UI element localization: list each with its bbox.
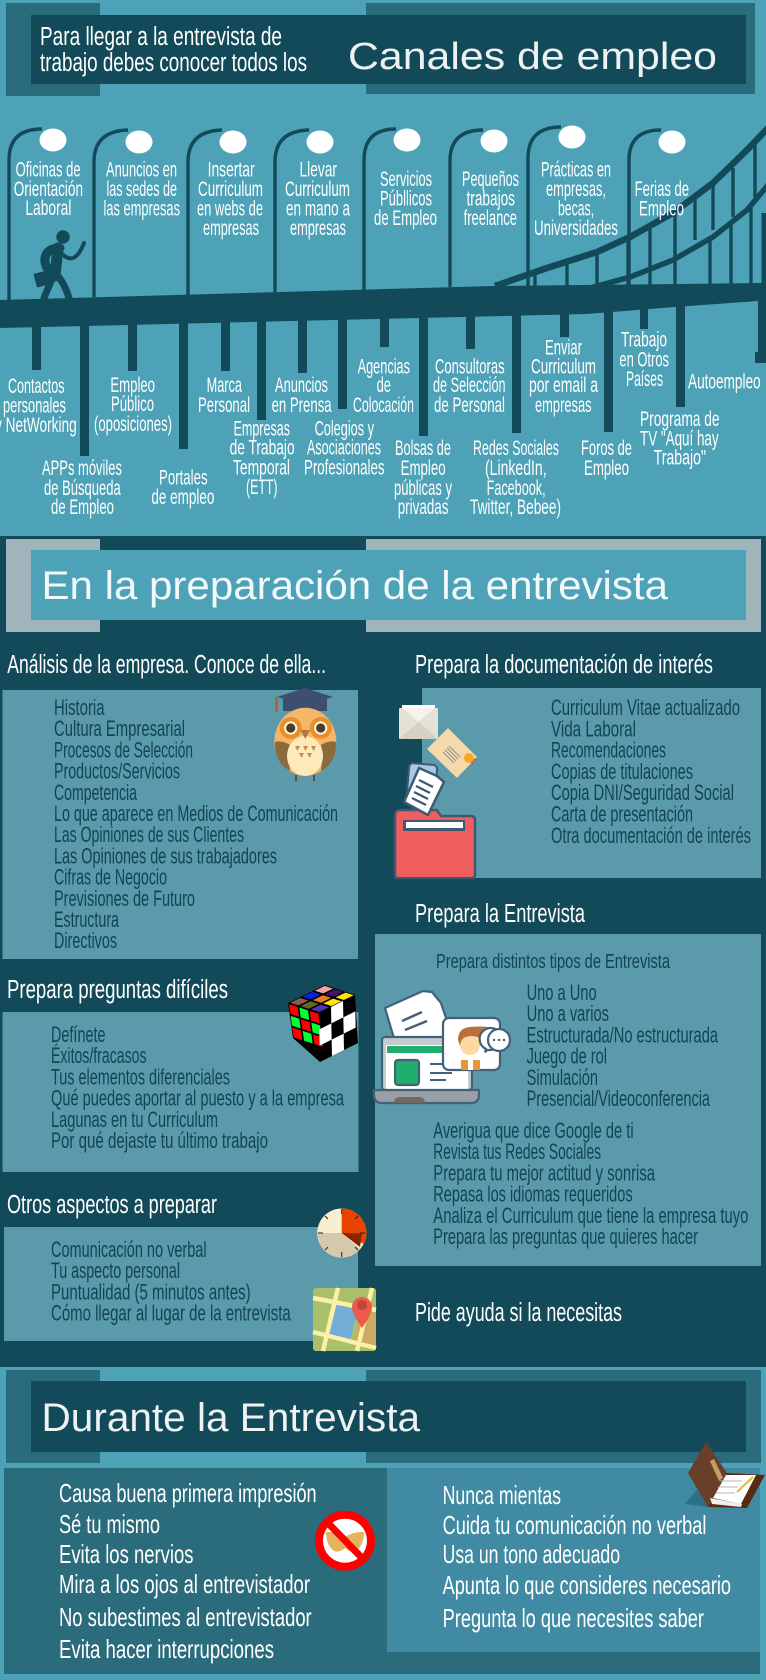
- panel: documentación de interés: [422, 688, 761, 878]
- channel: oficinas de orientación: Orientación: [14, 178, 83, 201]
- subheading: tipos de entrevista: Prepara distintos tipos de Entrevista: [436, 951, 671, 973]
- channel: consultoras: [433, 356, 506, 417]
- channel: anuncios en prensa: [272, 374, 332, 417]
- header: en la preparación de la entrevista: En la preparación de la entrevista: [42, 564, 669, 608]
- channel: contactos personales: personales: [3, 394, 66, 418]
- panel: columna derecha: [387, 1468, 760, 1652]
- panel: preguntas difíciles: Éxitos/fracasos: [51, 1043, 146, 1068]
- channel: agencias de colocación: de: [377, 374, 391, 397]
- channel: llevar curriculum: [285, 158, 350, 240]
- channel: programa de tv: [640, 408, 720, 470]
- channel: insertar curriculum: empresas: [203, 217, 259, 240]
- bridge deck: [0, 283, 766, 328]
- panel: otros aspectos: Puntualidad (5 minutos antes): [51, 1279, 251, 1304]
- channel: trabajo en otros países: Trabajo: [621, 328, 667, 352]
- panel: documentación de interés: Vida Laboral: [551, 716, 636, 741]
- list: columna derecha: Usa un tono adecuado: [443, 1539, 620, 1569]
- channel: prácticas: empresas,: [546, 178, 606, 201]
- section background: durante la entrevista: [0, 1367, 766, 1680]
- channel: marca personal: [198, 374, 250, 417]
- panel: preguntas difíciles: Qué puedes aportar al puesto y a la empresa: [51, 1086, 345, 1111]
- channel: empleo público: [94, 374, 172, 436]
- icon: laptop with candidate profile: [374, 991, 510, 1103]
- channel: apps móviles: APPs móviles: [42, 457, 122, 480]
- channel: insertar curriculum: Insertar: [208, 158, 255, 182]
- channel: oficinas de orientación: Oficinas de: [16, 158, 81, 182]
- channel: trabajo en otros países: [619, 328, 669, 391]
- channel: contactos personales: Contactos: [8, 375, 64, 398]
- list: columna izquierda: Causa buena primera impresión: [59, 1478, 317, 1508]
- list: columna izquierda: Evita los nervios: [59, 1539, 194, 1569]
- channel: prácticas: becas,: [558, 198, 594, 220]
- channel: anuncios en sedes: las empresas: [104, 198, 180, 220]
- panel: preguntas difíciles: Defínete: [51, 1022, 106, 1047]
- channel: redes sociales: [470, 437, 561, 519]
- list: consejos de preparación: Repasa los idiomas requeridos: [433, 1182, 633, 1207]
- channel: anuncios en prensa: en Prensa: [272, 394, 332, 417]
- panel: análisis de la empresa: Directivos: [54, 928, 117, 953]
- heading: prepara la entrevista: Prepara la Entrevista: [415, 900, 586, 928]
- lamp lights: [40, 126, 686, 154]
- header: durante la entrevista: Durante la Entrevista: [42, 1396, 421, 1440]
- channel: colegios y asociaciones: Colegios y: [315, 418, 374, 440]
- channel: colegios y asociaciones: [304, 418, 384, 480]
- panel: análisis de la empresa: Cultura Empresarial: [54, 716, 185, 741]
- list: tipos de entrevista: Uno a varios: [527, 1001, 609, 1026]
- channel: empleo público: Público: [111, 393, 154, 416]
- channel: empresas de trabajo temporal: de Trabajo: [230, 436, 295, 460]
- panel: análisis de la empresa: Previsiones de Futuro: [54, 886, 195, 911]
- channel: empleo público: Empleo: [110, 374, 155, 397]
- channel: trabajo en otros países: en Otros: [619, 348, 669, 372]
- intro text: trabajo debes conocer todos los: [40, 49, 307, 77]
- channel: servicios públicos: Públlicos: [380, 188, 432, 210]
- channel: servicios públicos: [374, 168, 437, 230]
- channel: empleo público: (oposiciones): [94, 413, 172, 436]
- heading: otros aspectos: Otros aspectos a preparar: [7, 1191, 217, 1219]
- channel: consultoras: de Selección: [433, 374, 506, 397]
- panel: prepara la entrevista: [375, 934, 761, 1266]
- channel: llevar curriculum: Llevar: [300, 158, 337, 182]
- list: consejos de preparación: Prepara tu mejor actitud y sonrisa: [433, 1160, 656, 1185]
- list: columna izquierda: [59, 1478, 317, 1664]
- section background: canales de empleo: [0, 0, 766, 536]
- channel: colegios y asociaciones: Asociaciones: [307, 436, 381, 460]
- header: durante la entrevista: [6, 1370, 761, 1463]
- channel: enviar curriculum por email: por email a: [529, 374, 598, 397]
- channel: programa de tv: Trabajo": [654, 446, 706, 470]
- channel: agencias de colocación: Colocación: [353, 394, 414, 417]
- hanging rods: [32, 298, 766, 456]
- list: tipos de entrevista: Simulación: [527, 1065, 598, 1090]
- icon: clock: [317, 1208, 367, 1258]
- channel: portales de empleo: Portales: [159, 466, 208, 490]
- channel: pequeños trabajos: trabajos: [466, 188, 515, 210]
- channel: insertar curriculum: [197, 158, 263, 240]
- header: en la preparación de la entrevista: [6, 539, 761, 632]
- channel: foros de empleo: [581, 437, 632, 480]
- channel: marca personal: Marca: [207, 374, 242, 397]
- list: columna izquierda: No subestimes al entrevistador: [59, 1602, 312, 1632]
- channel: trabajo en otros países: Países: [626, 368, 663, 391]
- list: tipos de entrevista: Uno a Uno: [527, 980, 597, 1005]
- channel: apps móviles: [42, 457, 122, 519]
- icon: envelope: [399, 705, 438, 739]
- list: tipos de entrevista: Juego de rol: [527, 1044, 607, 1069]
- channel: enviar curriculum por email: empresas: [535, 394, 592, 417]
- panel: análisis de la empresa: Competencia: [54, 780, 137, 805]
- panel: documentación de interés: Carta de presentación: [551, 802, 693, 826]
- panel: preguntas difíciles: Por qué dejaste tu último trabajo: [51, 1128, 268, 1153]
- list: columna izquierda: Sé tu mismo: [59, 1509, 160, 1539]
- channel: anuncios en sedes: las sedes de: [106, 178, 177, 201]
- panel: documentación de interés: Recomendaciones: [551, 738, 666, 763]
- channel: empresas de trabajo temporal: (ETT): [246, 476, 278, 499]
- channel: anuncios en sedes: Anuncios en: [106, 158, 177, 182]
- icon: map with pin: [313, 1288, 376, 1351]
- channel: prácticas: [534, 158, 618, 240]
- panel: otros aspectos: [4, 1227, 358, 1341]
- channel: bolsas de empleo: [394, 437, 452, 519]
- channel: empresas de trabajo temporal: Empresas: [234, 418, 290, 440]
- icon: folder with documents: [395, 763, 475, 878]
- panel: otros aspectos: Tu aspecto personal: [51, 1258, 180, 1283]
- channel: insertar curriculum: Curriculum: [198, 178, 263, 201]
- icon: diploma with seal: [427, 728, 477, 778]
- channel: consultoras: de Personal: [434, 394, 505, 417]
- intro text: [40, 23, 307, 77]
- header: canales de empleo: [6, 3, 755, 96]
- panel: otros aspectos: Comunicación no verbal: [51, 1237, 207, 1262]
- channel: portales de empleo: [151, 466, 214, 509]
- channel: bolsas de empleo: Empleo: [401, 457, 446, 480]
- channel: foros de empleo: Foros de: [581, 437, 632, 460]
- channel: empresas de trabajo temporal: Temporal: [233, 456, 290, 480]
- panel: análisis de la empresa: Estructura: [54, 907, 119, 932]
- channel: agencias de colocación: Agencias: [358, 356, 410, 378]
- channel: prácticas: Prácticas en: [541, 158, 611, 182]
- channel: programa de tv: Programa de: [640, 408, 720, 431]
- channel: oficinas de orientación: [14, 158, 83, 220]
- channel: foros de empleo: Empleo: [584, 457, 629, 480]
- intro text: Para llegar a la entrevista de: [40, 23, 282, 51]
- panel: preguntas difíciles: [2, 1012, 358, 1172]
- list: columna izquierda: Mira a los ojos al entrevistador: [59, 1569, 310, 1599]
- channel: portales de empleo: de empleo: [151, 486, 214, 509]
- channel: colegios y asociaciones: Profesionales: [304, 456, 384, 480]
- list: columna izquierda: Evita hacer interrupciones: [59, 1634, 274, 1664]
- callout: pide ayuda: Pide ayuda si la necesitas: [415, 1299, 622, 1327]
- channel: servicios públicos: Servicios: [380, 168, 432, 191]
- channel: empresas de trabajo temporal: [230, 418, 295, 499]
- street lamps: [9, 127, 661, 300]
- channel: pequeños trabajos: Pequeños: [462, 168, 519, 191]
- channel: llevar curriculum: empresas: [290, 217, 346, 240]
- channel: ferias de empleo: Ferias de: [635, 178, 689, 201]
- panel: otros aspectos: Cómo llegar al lugar de la entrevista: [51, 1301, 291, 1326]
- channel: redes sociales: Facebook,: [487, 477, 546, 500]
- panel: análisis de la empresa: Procesos de Selección: [54, 737, 193, 762]
- title: canales de empleo: Canales de empleo: [348, 36, 717, 78]
- panel: consejos durante la entrevista: [4, 1468, 760, 1674]
- panel: análisis de la empresa: Las Opiniones de sus Clientes: [54, 822, 244, 847]
- channel: programa de tv: TV "Aquí hay: [640, 428, 719, 450]
- panel: análisis de la empresa: [2, 690, 358, 959]
- channel: insertar curriculum: en webs de: [197, 198, 263, 220]
- channel: apps móviles: de Empleo: [51, 496, 114, 519]
- channel: pequeños trabajos: [462, 168, 519, 230]
- panel: documentación de interés: Copias de titulaciones: [551, 759, 693, 784]
- channel: llevar curriculum: Curriculum: [285, 178, 350, 201]
- panel: análisis de la empresa: Productos/Servicios: [54, 759, 180, 784]
- icon: open notebook: [685, 1442, 765, 1508]
- list: consejos de preparación: Revista tus Redes Sociales: [433, 1139, 601, 1164]
- channel: anuncios en prensa: Anuncios: [275, 374, 328, 397]
- icon: owl with graduation cap: [274, 688, 336, 781]
- list: tipos de entrevista: [527, 980, 719, 1111]
- heading: prepara preguntas difíciles: Prepara preguntas difíciles: [7, 976, 228, 1004]
- channel: redes sociales: Twitter, Bebee): [470, 496, 561, 519]
- channel: enviar curriculum por email: Enviar: [545, 336, 582, 360]
- channel: redes sociales: (LinkedIn,: [485, 457, 547, 480]
- channel: llevar curriculum: en mano a: [286, 198, 350, 220]
- channel: servicios públicos: de Empleo: [374, 207, 437, 230]
- panel: análisis de la empresa: Las Opiniones de sus trabajadores: [54, 843, 277, 868]
- channel: prácticas: Universidades: [534, 217, 618, 240]
- panel: análisis de la empresa: Historia: [54, 695, 105, 720]
- channel: oficinas de orientación: Laboral: [25, 197, 71, 220]
- channel: apps móviles: de Búsqueda: [44, 477, 121, 500]
- channel: enviar curriculum por email: Curriculum: [531, 356, 596, 378]
- list: consejos de preparación: Averigua que dice Google de ti: [433, 1118, 634, 1143]
- panel: análisis de la empresa: Lo que aparece en Medios de Comunicación: [54, 801, 338, 826]
- channel: marca personal: Personal: [198, 394, 250, 417]
- channel: bolsas de empleo: privadas: [398, 496, 448, 519]
- labels below the bridge: [0, 328, 761, 519]
- list: columna derecha: [443, 1480, 731, 1633]
- channel: pequeños trabajos: freelance: [464, 207, 517, 230]
- channel: ferias de empleo: Empleo: [639, 198, 684, 220]
- channel: redes sociales: Redes Sociales: [473, 437, 559, 460]
- suspension cables: [495, 128, 766, 288]
- list: columna derecha: Nunca mientas: [443, 1480, 561, 1510]
- channel: bolsas de empleo: Bolsas de: [395, 437, 451, 460]
- bridge illustration: [0, 126, 766, 456]
- panel: preguntas difíciles: Tus elementos diferenciales: [51, 1064, 230, 1089]
- channel: agencias de colocación: [353, 356, 414, 417]
- list: consejos de preparación: [433, 1118, 748, 1249]
- channel: consultoras: Consultoras: [435, 356, 505, 378]
- channel: enviar curriculum por email: [529, 336, 598, 417]
- icon: walking person with briefcase: [35, 230, 84, 298]
- channel: ferias de empleo: [635, 178, 689, 220]
- channel: anuncios en sedes: [104, 158, 180, 220]
- icon: rubik cube: [288, 985, 358, 1062]
- icon: prohibited mask: [319, 1515, 371, 1567]
- channel: bolsas de empleo: públicas y: [394, 477, 452, 500]
- section background: preparación: [0, 536, 766, 1367]
- panel: preguntas difíciles: Lagunas en tu Curriculum: [51, 1107, 218, 1132]
- heading: análisis de la empresa: Análisis de la empresa. Conoce de ella...: [7, 651, 326, 679]
- panel: análisis de la empresa: Cifras de Negocio: [54, 865, 167, 890]
- channel: contactos personales: [0, 375, 77, 437]
- labels above the bridge: [14, 158, 689, 240]
